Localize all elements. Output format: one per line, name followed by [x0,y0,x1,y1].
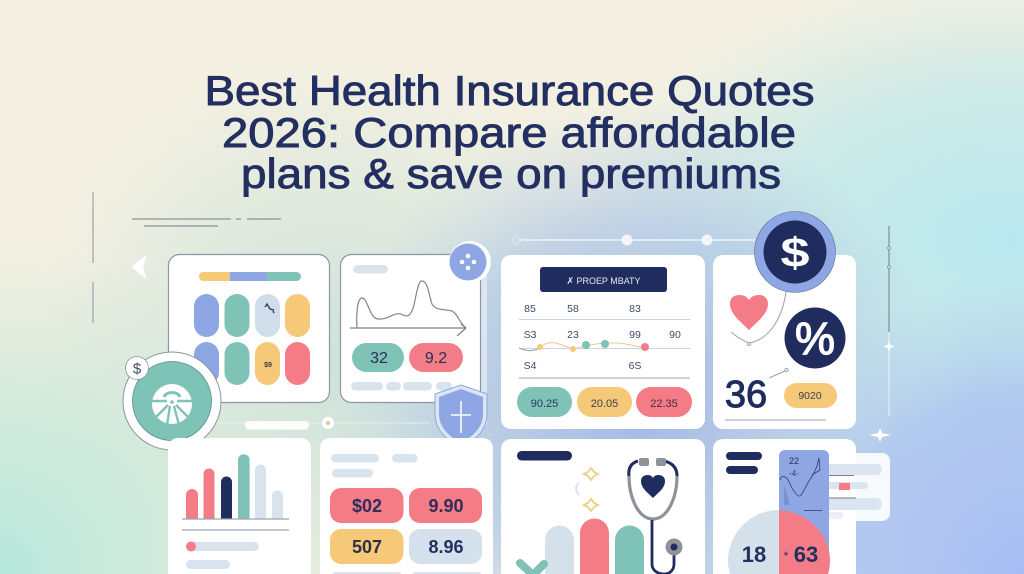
panel: price tiles [320,438,493,574]
panel: pie and chart [713,439,856,574]
panel: line chart [340,254,487,426]
label placeholder [353,265,388,274]
value pill teal: 32 [370,350,388,367]
icon: round badge with dots [449,241,491,283]
table header [540,267,667,292]
table values: 23 [567,329,579,341]
blue card [779,450,829,574]
line chart [350,281,466,336]
blue card: -4- [789,469,799,478]
icon: shield [435,385,487,447]
pill grid: $9 [264,362,272,369]
side lines [829,464,856,519]
connector curve [731,292,786,343]
panel: prep table [501,255,705,429]
title: 2026: Compare afforddable [222,109,796,156]
placeholder bars [351,382,452,390]
value pill yellow [784,383,837,408]
value pill yellow: 9020 [798,390,822,402]
legend bars [186,542,259,569]
icon: small dollar badge [126,356,148,380]
price tile [409,488,482,523]
title: plans & save on premiums [241,150,781,197]
sparkles [584,468,598,511]
table values [524,303,681,372]
icon: dollar badge [754,212,836,292]
panel: side card [840,453,890,521]
blue card: 22 [789,456,799,466]
price tile: 8.96 [428,537,464,557]
value pill red: 22.35 [650,398,678,410]
bars [186,454,283,519]
table values: S3 [524,329,537,341]
value pill teal [517,387,572,417]
bars [545,518,644,574]
tri-colour bar [199,272,301,281]
panel: stethoscope [501,439,705,574]
value pill yellow: 20.05 [591,398,618,410]
header bar [517,451,572,460]
pie [728,510,830,574]
value pill teal: 90.25 [531,398,558,410]
pie: 18 [742,542,766,567]
slider connector [215,417,430,430]
value pill red [409,343,463,372]
icon: percent badge: % [795,313,835,364]
panel: bar chart [168,438,311,574]
price tile: 507 [352,537,382,557]
price tile: $02 [352,496,382,516]
title [204,67,814,197]
price tile [409,529,482,564]
value pill red [636,387,692,417]
table values: 85 [524,303,536,315]
table values: 90 [669,329,681,341]
stethoscope [629,458,682,574]
icon: percent badge [784,308,846,368]
menu bars [726,452,762,474]
decorative thin lines, top left [93,192,281,323]
icon: heart [730,295,768,330]
icon: teal circular badge [123,352,221,450]
title: Best Health Insurance Quotes [204,67,814,114]
icon: small dollar badge: $ [133,360,142,378]
pie: * [784,549,789,563]
value pill red: 9.2 [425,350,447,367]
table values: 58 [567,303,579,315]
decorative right line with sparkle [869,226,894,442]
value pill teal [352,343,404,372]
connector line with dots, top [512,234,755,246]
table values: S4 [524,360,537,372]
table header: ✗ PROEP MBATY [566,276,641,287]
pill grid [194,294,310,385]
panel: heart and percent [713,255,856,429]
big number: 36 [725,374,767,416]
value pill yellow [577,387,632,417]
emblem [150,384,194,425]
table values: 99 [629,329,641,341]
icon: left arrow glyph [133,257,145,277]
panel: colored pills grid [168,254,330,402]
price tile: 9.90 [428,496,464,516]
sparkline [519,340,649,352]
table values: 6S [629,360,641,372]
table values: 83 [629,303,641,315]
price tile [330,488,404,523]
icon: dollar badge: $ [780,229,810,276]
check mark [520,563,544,574]
price tile [330,529,404,564]
pie: 63 [794,542,818,567]
